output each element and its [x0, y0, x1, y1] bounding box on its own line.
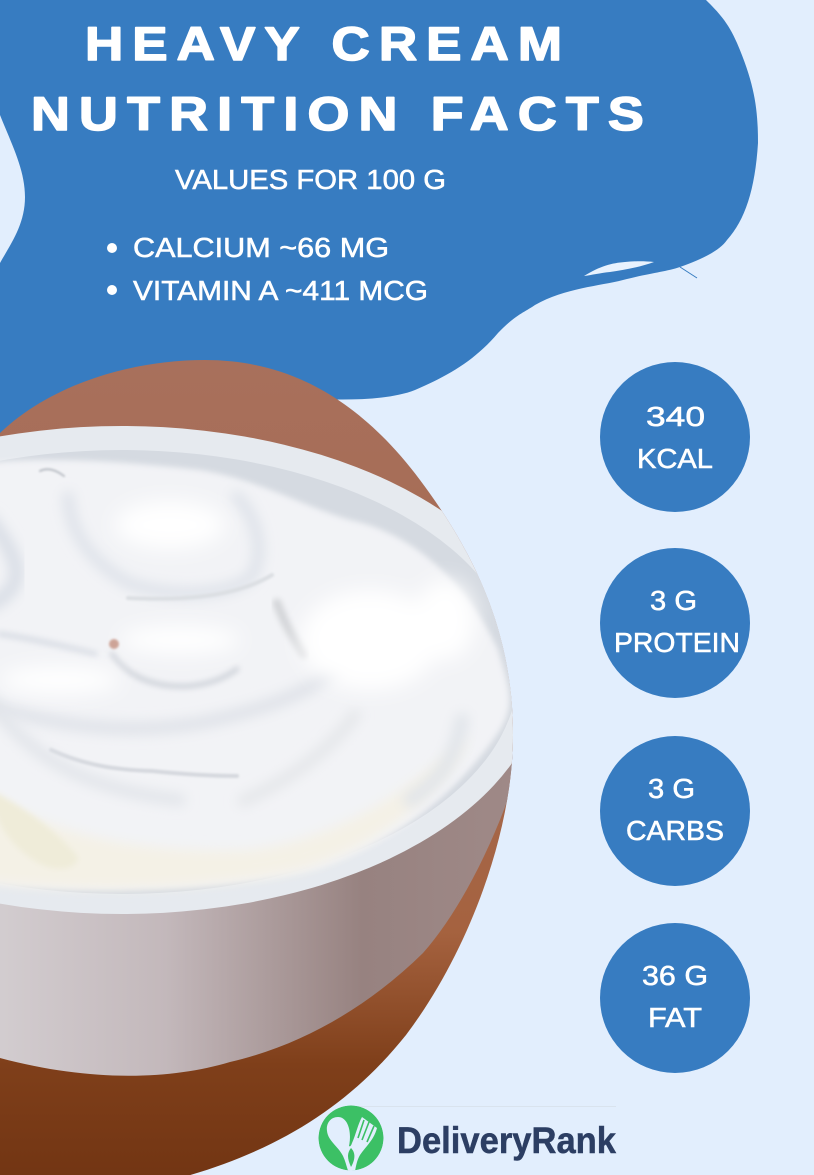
bullet list: CALCIUM ~66 MG — [133, 232, 389, 263]
stat: calories: KCAL — [637, 443, 713, 474]
stat: carbs: 3 G — [648, 773, 695, 804]
bowl inner wall — [0, 450, 518, 894]
stat: calories: 340 — [646, 401, 705, 432]
bullet list — [107, 232, 428, 306]
wordmark: DeliveryRank — [397, 1120, 616, 1161]
stat: carbs — [600, 736, 750, 886]
stat: calories — [600, 362, 750, 512]
stat: protein: PROTEIN — [614, 627, 740, 658]
icon: spoon and fork — [318, 1106, 384, 1175]
stat: carbs: CARBS — [626, 815, 724, 846]
subtitle: VALUES FOR 100 G — [175, 164, 446, 195]
title — [31, 17, 653, 140]
stat: fat: FAT — [648, 1002, 702, 1033]
cream warm drip — [0, 790, 78, 869]
thin line at blob edge — [680, 267, 697, 278]
cream swirl shadows — [0, 469, 462, 801]
title: HEAVY CREAM — [85, 17, 571, 70]
header blob — [0, 0, 758, 440]
cream mass — [0, 460, 509, 890]
stat: fat: 36 G — [642, 960, 708, 991]
bowl rim — [0, 426, 544, 914]
photo: bowl of whipped cream — [0, 355, 544, 1175]
stat: protein: 3 G — [650, 585, 697, 616]
wood table — [0, 355, 520, 1175]
bowl body — [0, 747, 513, 1076]
title: NUTRITION FACTS — [31, 87, 653, 140]
stat: fat — [600, 923, 750, 1073]
bright cream highlights — [0, 501, 475, 694]
stat: protein — [600, 548, 750, 698]
wood speck in cream — [109, 639, 119, 649]
bullet list: VITAMIN A ~411 MCG — [133, 275, 428, 306]
white sliver in blob — [584, 261, 654, 276]
logo: DeliveryRank — [318, 1106, 616, 1175]
cream warm shading — [0, 792, 409, 886]
